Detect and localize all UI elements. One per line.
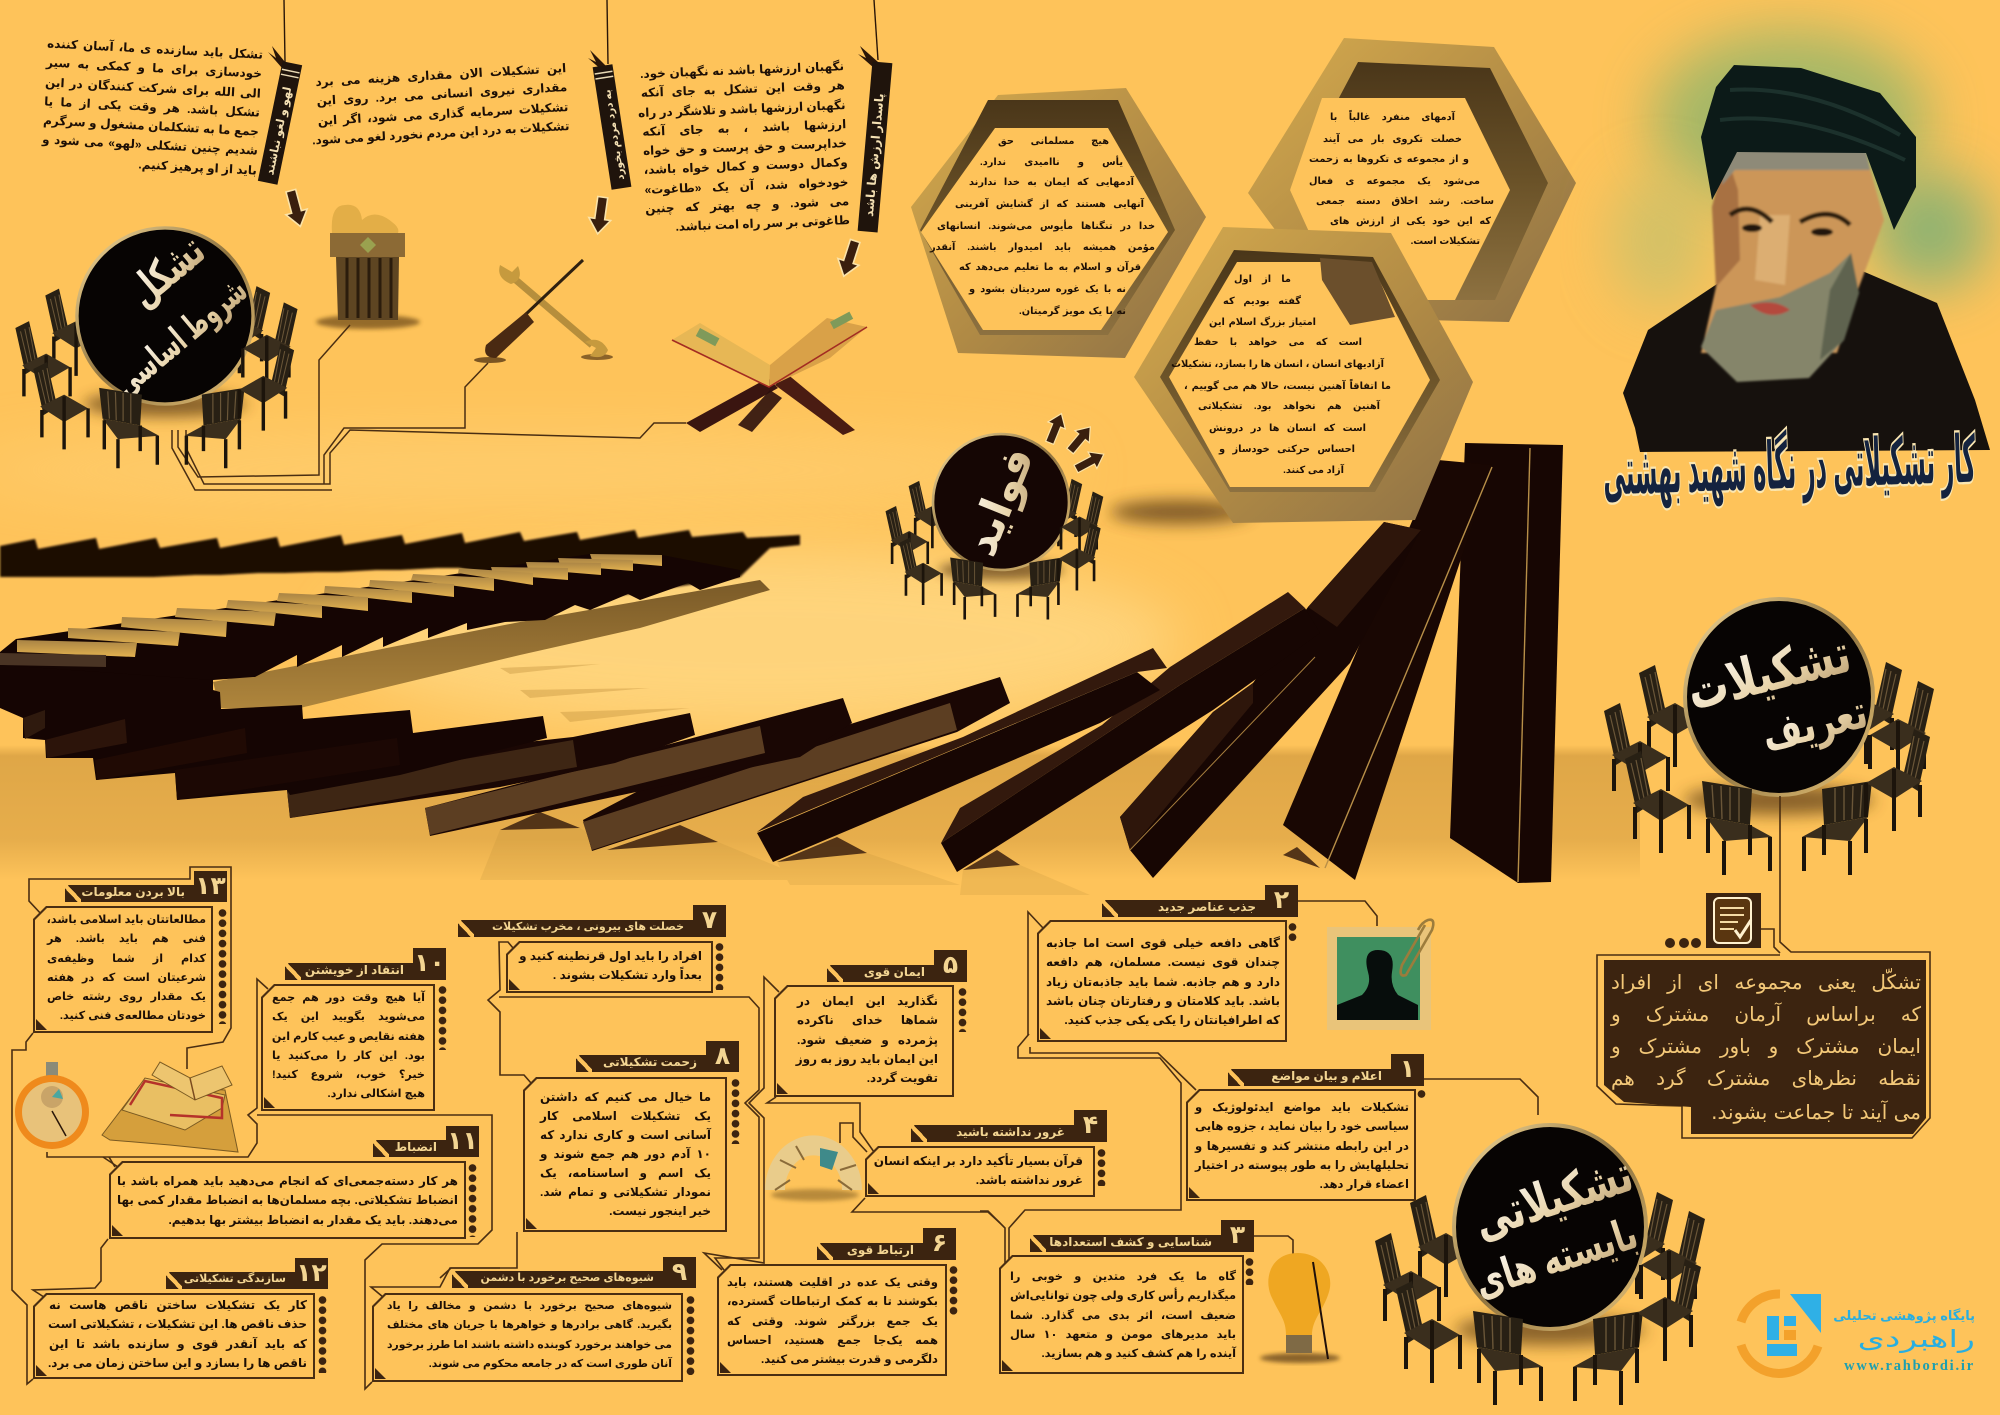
circle badge: conditions: تشکل xyxy=(118,225,214,316)
hexagon 1 text: آدمهایی که ایمان به خدا ندارند xyxy=(969,177,1134,188)
box 12: که باید آنقدر قوی و سازنده باشد تا این xyxy=(49,1337,307,1351)
arrow down 3 xyxy=(833,238,866,280)
hexagon 2 text: آدمهای منفرد غالباً با xyxy=(1330,112,1455,123)
box 13: کدام از شما وظیفه‌ی xyxy=(47,953,206,965)
box 5: پژمرده و ضعیف شود. xyxy=(797,1033,938,1047)
text block: condition 2: این تشکیلات الان مقداری هزینه می برد xyxy=(315,61,567,89)
box 2: باشد. باید کلامتان و رفتارتان چنان باشد xyxy=(1046,994,1280,1008)
box 6 xyxy=(717,1228,958,1376)
hexagon 1 text xyxy=(930,136,1155,317)
dominoes: front row falling xyxy=(0,443,1563,883)
definition box xyxy=(1604,960,1926,1134)
circle badge: definition of organization: تشکیلات xyxy=(1681,624,1857,722)
box 8: نمودار تشکیلاتی و تمام شد. xyxy=(540,1185,711,1199)
box 7: بعداً وارد تشکیلات بشوند . xyxy=(553,968,702,982)
box 10: هفته نقایص و عیب کارم این xyxy=(272,1031,425,1043)
hexagon 2 text xyxy=(1309,110,1494,247)
box 9: بگیرید. گاهی برادرها و خواهرها با جریان های مختلف xyxy=(387,1319,672,1331)
hexagon 2 text: ساخت. رشد اخلاق دسته جمعی xyxy=(1316,196,1494,207)
icon: wrench and screwdriver xyxy=(474,260,613,363)
hanging tag 3: پاسدار ارزش ها باشد xyxy=(862,93,887,217)
text block: condition 1: تشکل باشد. هر وقت یکی از ما یا xyxy=(44,94,260,120)
hexagon 3 text: ما از اول xyxy=(1234,274,1291,285)
box 1: در این رابطه منتشر کند و تفسیرها و xyxy=(1195,1140,1409,1153)
box 5: این ایمان باید روز به روز xyxy=(796,1052,938,1066)
hexagon 1 text: نه با یک مویز گرمیتان. xyxy=(1019,306,1126,317)
box 2: جذب عناصر جدید xyxy=(1158,900,1256,914)
box 10 xyxy=(261,948,446,1111)
connector lines: conditions xyxy=(172,325,686,490)
hexagon 2 text: که این خود یکی از ارزش های xyxy=(1330,216,1491,227)
box 12: ۱۲ xyxy=(296,1259,327,1287)
box 5: ایمان قوی xyxy=(864,965,925,979)
hexagon 1 text: خدا در تنگناها مأیوس می‌شوند. انسانهای xyxy=(937,221,1155,232)
box 1: تحلیلهایش را به طور پیوسته در اختیار xyxy=(1195,1159,1409,1172)
hexagon 1 text: نه با یک غوره سردیتان بشود و xyxy=(969,284,1126,295)
definition text: نقطه نظرهای مشترک گرد هم xyxy=(1611,1066,1921,1090)
icon: trash bin xyxy=(316,205,420,329)
hexagon 1 text: آنهایی هستند که از گشایش آفرینی xyxy=(955,199,1144,210)
arrow down 2 xyxy=(587,196,614,235)
box 2: چندان قوی نیست. مسلمان، هم دافعه xyxy=(1046,955,1280,969)
hanging tag 2: به درد مردم بخورد xyxy=(601,89,627,181)
box 3: ضعیف است، اثر بدی می گذارد. شما xyxy=(1010,1310,1236,1322)
box 5: ۵ xyxy=(943,951,958,979)
logo text xyxy=(1833,1308,1975,1374)
definition text xyxy=(1610,968,1922,1124)
icon: light bulb xyxy=(1260,1253,1340,1363)
icon: Quran on stand xyxy=(672,312,867,435)
definition text: تشکّل یعنی مجموعه ای از افراد xyxy=(1611,970,1921,994)
box 12: حذف ناقص ها. این تشکیلات ، تشکیلاتی است xyxy=(48,1317,307,1331)
box 9: شیوه‌های صحیح برخورد با دشمن xyxy=(480,1272,654,1284)
icon: person photo with paper clip xyxy=(1327,920,1433,1030)
circle badge: conditions xyxy=(15,220,298,468)
hanging tag 3 xyxy=(858,0,892,233)
hexagon 3 text: ما اتفاقاً آهنین نیست، حالا هم می گوییم ، xyxy=(1184,381,1391,392)
circle badge: organizational necessities: بایسته های xyxy=(1468,1209,1643,1307)
portrait of Shahid Beheshti xyxy=(1610,30,1990,452)
box 12 xyxy=(33,1258,328,1379)
arrows up: benefits xyxy=(1041,410,1108,477)
box 9: شیوه‌های صحیح برخورد با دشمن و مخالف را یاد xyxy=(387,1300,672,1312)
box 6: دلگرمی و قدرت بیشتر می کنید. xyxy=(761,1353,938,1366)
hanging tag 1 xyxy=(258,0,302,185)
box 5: نگذارید این ایمان در xyxy=(797,994,938,1008)
hexagon 3 text: آهنین هم نخواهد بود. تشکیلاتی xyxy=(1198,401,1380,412)
hexagon 3 text: است که می خواهد با حفظ xyxy=(1194,337,1362,348)
box 10: هیچ اشکالی ندارد. xyxy=(328,1088,425,1100)
box 8: زحمت تشکیلاتی xyxy=(603,1055,697,1069)
hexagon 3 text: گفته بودیم که xyxy=(1223,296,1301,307)
box 13: ۱۳ xyxy=(195,872,226,900)
text block: condition 2: مقداری نیروی انسانی می برد. روی این xyxy=(316,80,568,108)
text block: condition 1: جمع ما به تشکلمان مشغول و سرگرم xyxy=(43,114,259,139)
text block: condition 3 xyxy=(638,59,850,234)
box 4: قرآن بسیار تأکید دارد بر اینکه انسان xyxy=(874,1154,1083,1168)
text block: condition 3: طاغوتی بر سر راه امت نباشد. xyxy=(675,213,850,234)
box 3: باید مدیرهای مومن و متعهد ۱۰ سال xyxy=(1010,1329,1236,1341)
logo text: www.rahbordi.ir xyxy=(1844,1358,1975,1374)
box 4: ۴ xyxy=(1083,1111,1098,1139)
box 12: کار یک تشکیلات ساختن ناقص هاست نه xyxy=(49,1298,307,1312)
hexagon frame 2 xyxy=(1248,38,1576,322)
text block: condition 1: شدیم چنین تشکلی «لهو» می شود و xyxy=(42,133,258,158)
box 5: شماها خدای ناکرده xyxy=(797,1013,938,1027)
hexagon frame 3 xyxy=(1134,227,1473,523)
box 8: یک اسم و اساسنامه، یک xyxy=(540,1166,711,1180)
text block: condition 1: خودسازی برای ما و کمکی به سیر xyxy=(46,56,262,81)
box 11: می‌دهند. باید یک مقدار به انضباط بیشتر بها بدهیم. xyxy=(168,1213,458,1227)
box 8 xyxy=(523,1041,740,1232)
hexagon 3 text: امتیاز بزرگ اسلام این xyxy=(1209,317,1316,328)
box 8: ما خیال می کنیم که داشتن xyxy=(540,1090,711,1104)
hexagon 1 text: یأس و ناامیدی ندارد. xyxy=(980,157,1123,168)
box 8: خیر اینجور نیست. xyxy=(609,1204,711,1218)
box 11: انضباط تشکیلاتی. بچه مسلمان‌ها به انضباط مقدار کمی بها xyxy=(117,1193,458,1207)
box 11: ۱۱ xyxy=(447,1127,478,1155)
box 10: بود. این کار را می‌کنید یا xyxy=(272,1050,425,1062)
text block: condition 2: تشکیلات سرمایه گذاری می شود، اگر این xyxy=(317,100,569,128)
hexagon 3 text: آزادیهای انسان ، انسان ها را بسازد، تشکیلات xyxy=(1171,359,1384,370)
text block: condition 3: هر وقت این تشکل به جای آنکه xyxy=(641,78,845,100)
box 10: می‌شوید بگویید این یک xyxy=(272,1011,425,1023)
text block: condition 1: تشکل باید سازنده ی ما، آسان کننده xyxy=(47,36,263,62)
box 9 xyxy=(372,1257,696,1382)
box 7: ۷ xyxy=(702,906,717,934)
box 11: انضباط xyxy=(395,1140,437,1154)
box 6: همه یک‌جا جمع هستید، احساس xyxy=(727,1334,938,1347)
floor background xyxy=(0,430,1640,895)
hexagon frame 1 xyxy=(911,88,1206,358)
box 13 xyxy=(33,871,227,1033)
box 2: گاهی دافعه خیلی قوی است اما جاذبه xyxy=(1046,936,1280,950)
box 3: ۳ xyxy=(1230,1221,1245,1249)
box 4: غرور نداشته باشید xyxy=(956,1125,1065,1139)
hexagon 1 text: هیچ مسلمانی حق xyxy=(998,136,1109,147)
text block: condition 1 xyxy=(41,36,263,177)
box 11 xyxy=(109,1126,479,1239)
hexagon 3 text: احساس حرکتی خودساز و xyxy=(1219,444,1355,455)
hexagon 3 text xyxy=(1171,274,1391,476)
box 13: فنی هم باید باشد. هر xyxy=(47,933,206,945)
hanging tag 1: لهو و لغو نباشند xyxy=(264,86,295,176)
box 2: که اطرافیانتان را یکی یکی جذب کنید. xyxy=(1064,1013,1280,1027)
box 10: آیا هیچ وقت دور هم جمع xyxy=(272,992,425,1004)
box 8: ۱۰ آدم دور هم جمع شوند و xyxy=(540,1147,711,1161)
box 3 xyxy=(999,1220,1254,1374)
hexagon 1 text: قرآن و اسلام به ما تعلیم می‌دهد که xyxy=(959,262,1141,273)
box 7 xyxy=(458,905,726,993)
box 1: اعلام و بیان مواضع xyxy=(1271,1069,1382,1083)
box 7: خصلت های بیرونی ، مخرب تشکیلات xyxy=(492,921,684,933)
text block: condition 3: نگهبان ارزشها باشد نه نگهبان خود. xyxy=(640,59,844,81)
title calligraphy: کار تشکیلاتی در نگاه شهید بهشتی xyxy=(1602,421,1977,511)
box 2: ۲ xyxy=(1274,886,1289,914)
logo text: راهبردی xyxy=(1858,1326,1975,1353)
box 13: بالا بردن معلومات xyxy=(81,885,185,899)
hanging tag 2 xyxy=(588,0,631,190)
text block: condition 3: خودخواه شد، آن یک «طاغوت» xyxy=(644,175,849,197)
box 6: ۶ xyxy=(932,1229,947,1257)
box 13: مطالعاتتان باید اسلامی باشد، xyxy=(47,914,206,926)
box 8: یک تشکیلات اسلامی کار xyxy=(540,1109,711,1123)
box 10: انتقاد از خویشتن xyxy=(305,963,404,977)
box 2: دارد و هم جاذبه. شما باید جاذبه‌تان زیاد xyxy=(1046,975,1280,989)
circle badge: benefits xyxy=(886,434,1103,619)
box 4 xyxy=(865,1110,1107,1197)
box 1: ۱ xyxy=(1400,1055,1415,1083)
text block: condition 3: ارزشها باشد ، به جای آنکه xyxy=(642,117,846,139)
box 3: گاه ما یک فرد متدین و خوبی را xyxy=(1010,1271,1236,1283)
box 5 xyxy=(774,950,967,1097)
icon: stack of books xyxy=(102,1062,238,1152)
box 1: سیاسی خود را بیان نماید ، جزوه هایی xyxy=(1195,1120,1409,1133)
circle badge: conditions: شروط اساسی xyxy=(106,270,255,404)
box 10: خیر؟ خوب، شروع کنید! xyxy=(272,1069,425,1081)
hexagon 1 text: مؤمن همیشه باید امیدوار باشند. آنقدر xyxy=(930,242,1155,253)
box 8: آسانی است و کاری ندارد که xyxy=(540,1128,711,1142)
box 9: می خواهند برخورد کوبنده داشته باشند اما طرز برخورد xyxy=(387,1339,672,1351)
box 13: خودتان مطالعه‌ی فنی کنید. xyxy=(60,1010,206,1022)
box 9: آنان طوری است که در جامعه محکوم می شوند. xyxy=(429,1358,672,1370)
text block: condition 1: باید از او پرهیز کنیم. xyxy=(138,157,257,177)
box 6: ارتباط قوی xyxy=(847,1243,914,1257)
hexagon 3 text: است که انسان ها در درونش xyxy=(1209,423,1366,434)
circle badge: benefits: فواید xyxy=(957,441,1044,563)
logo: ring emblem xyxy=(1741,1294,1821,1373)
text block: condition 3: می شود. و چه بهتر که چنین xyxy=(645,194,849,216)
dominoes: rear row xyxy=(0,530,800,600)
hexagon 3 text: آزاد می کنند. xyxy=(1283,465,1344,476)
circle badge: definition of organization: تعریف xyxy=(1757,685,1873,763)
hexagon 2 text: می‌شود یک مجموعه ی فعال xyxy=(1309,176,1480,187)
definition text: که براساس آرمان مشترک و xyxy=(1611,1002,1921,1026)
icon: stopwatch xyxy=(15,1062,89,1149)
box 6: بکوشند تا به کمک ارتباطات گسترده، xyxy=(727,1295,938,1308)
box 3: میگذاریم رأس کاری ولی چون توانایی‌اش xyxy=(1010,1290,1236,1302)
box 1: تشکیلات باید مواضع ایدئولوژیک و xyxy=(1195,1101,1409,1114)
hexagon 2 text: تشکیلات است. xyxy=(1411,236,1480,247)
box 1: اعضاء قرار دهد. xyxy=(1320,1178,1409,1191)
box 13: شرعیتان است که در هفته xyxy=(47,972,206,984)
logo text: پایگاه پژوهشی تحلیلی xyxy=(1833,1308,1975,1323)
connector lines: numbered boxes xyxy=(12,796,1930,1389)
box 4: غرور نداشته باشد. xyxy=(976,1173,1083,1187)
box 5: تقویت گردد. xyxy=(867,1071,938,1085)
text block: condition 2: تشکیلات به درد این مردم نخورد لغو می شود. xyxy=(312,119,570,147)
box 2 xyxy=(1037,885,1298,1042)
text block: condition 3: نگهبان ارزشها باشد و تلاشگر در راه xyxy=(638,98,846,120)
arrow down 1 xyxy=(280,188,311,229)
text block: condition 3: وکمال دوست و کمال خواه باشد، xyxy=(644,156,848,177)
circle badge: definition of organization xyxy=(1604,599,1934,875)
text block: condition 1: الی الله برای شرکت کنندگان در این xyxy=(45,75,261,100)
hexagon 2 text: خصلت تکروی بار می آیند xyxy=(1323,134,1462,145)
definition text: می آیند تا جماعت بشوند. xyxy=(1711,1100,1921,1124)
icon: arch of blocks xyxy=(771,1145,859,1201)
icon: document badge xyxy=(1665,893,1761,948)
text block: condition 3: خداپرست و حق پرست و حق خواه xyxy=(643,136,847,158)
box 6: وقتی یک عده در اقلیت هستند، باید xyxy=(727,1276,938,1289)
box 11: هر کار دسته‌جمعی‌ای که انجام می‌دهید باید همراه باشد با xyxy=(117,1174,458,1188)
hexagon 2 text: و از مجموعه ی تکروها به زحمت xyxy=(1309,154,1469,165)
dominoes: middle row xyxy=(0,554,740,700)
box 3: آینده را هم کشف کنید و هم بسازید. xyxy=(1042,1348,1236,1360)
box 1 xyxy=(1186,1054,1426,1201)
box 12: سازندگی تشکیلاتی xyxy=(184,1273,286,1285)
box 7: افراد را باید اول قرنطینه کنید و xyxy=(519,949,702,963)
box 10: ۱۰ xyxy=(414,949,445,977)
box 12: ناقص ها را بسازد و این ساختن زمان می برد. xyxy=(48,1356,307,1370)
box 13: یک مقدار روی رشته خاص xyxy=(47,991,206,1003)
box 9: ۹ xyxy=(672,1258,687,1286)
box 3: شناسایی و کشف استعدادها xyxy=(1049,1235,1212,1249)
circle badge: organizational necessities xyxy=(1375,1125,1705,1405)
box 6: یک جمع بزرگتر شوند. وقتی که xyxy=(727,1315,938,1328)
box 8: ۸ xyxy=(715,1042,730,1070)
circle badge: organizational necessities: تشکیلاتی xyxy=(1467,1146,1639,1250)
definition text: ایمان مشترک و باور مشترک و xyxy=(1611,1034,1921,1058)
text block: condition 2 xyxy=(312,61,570,147)
